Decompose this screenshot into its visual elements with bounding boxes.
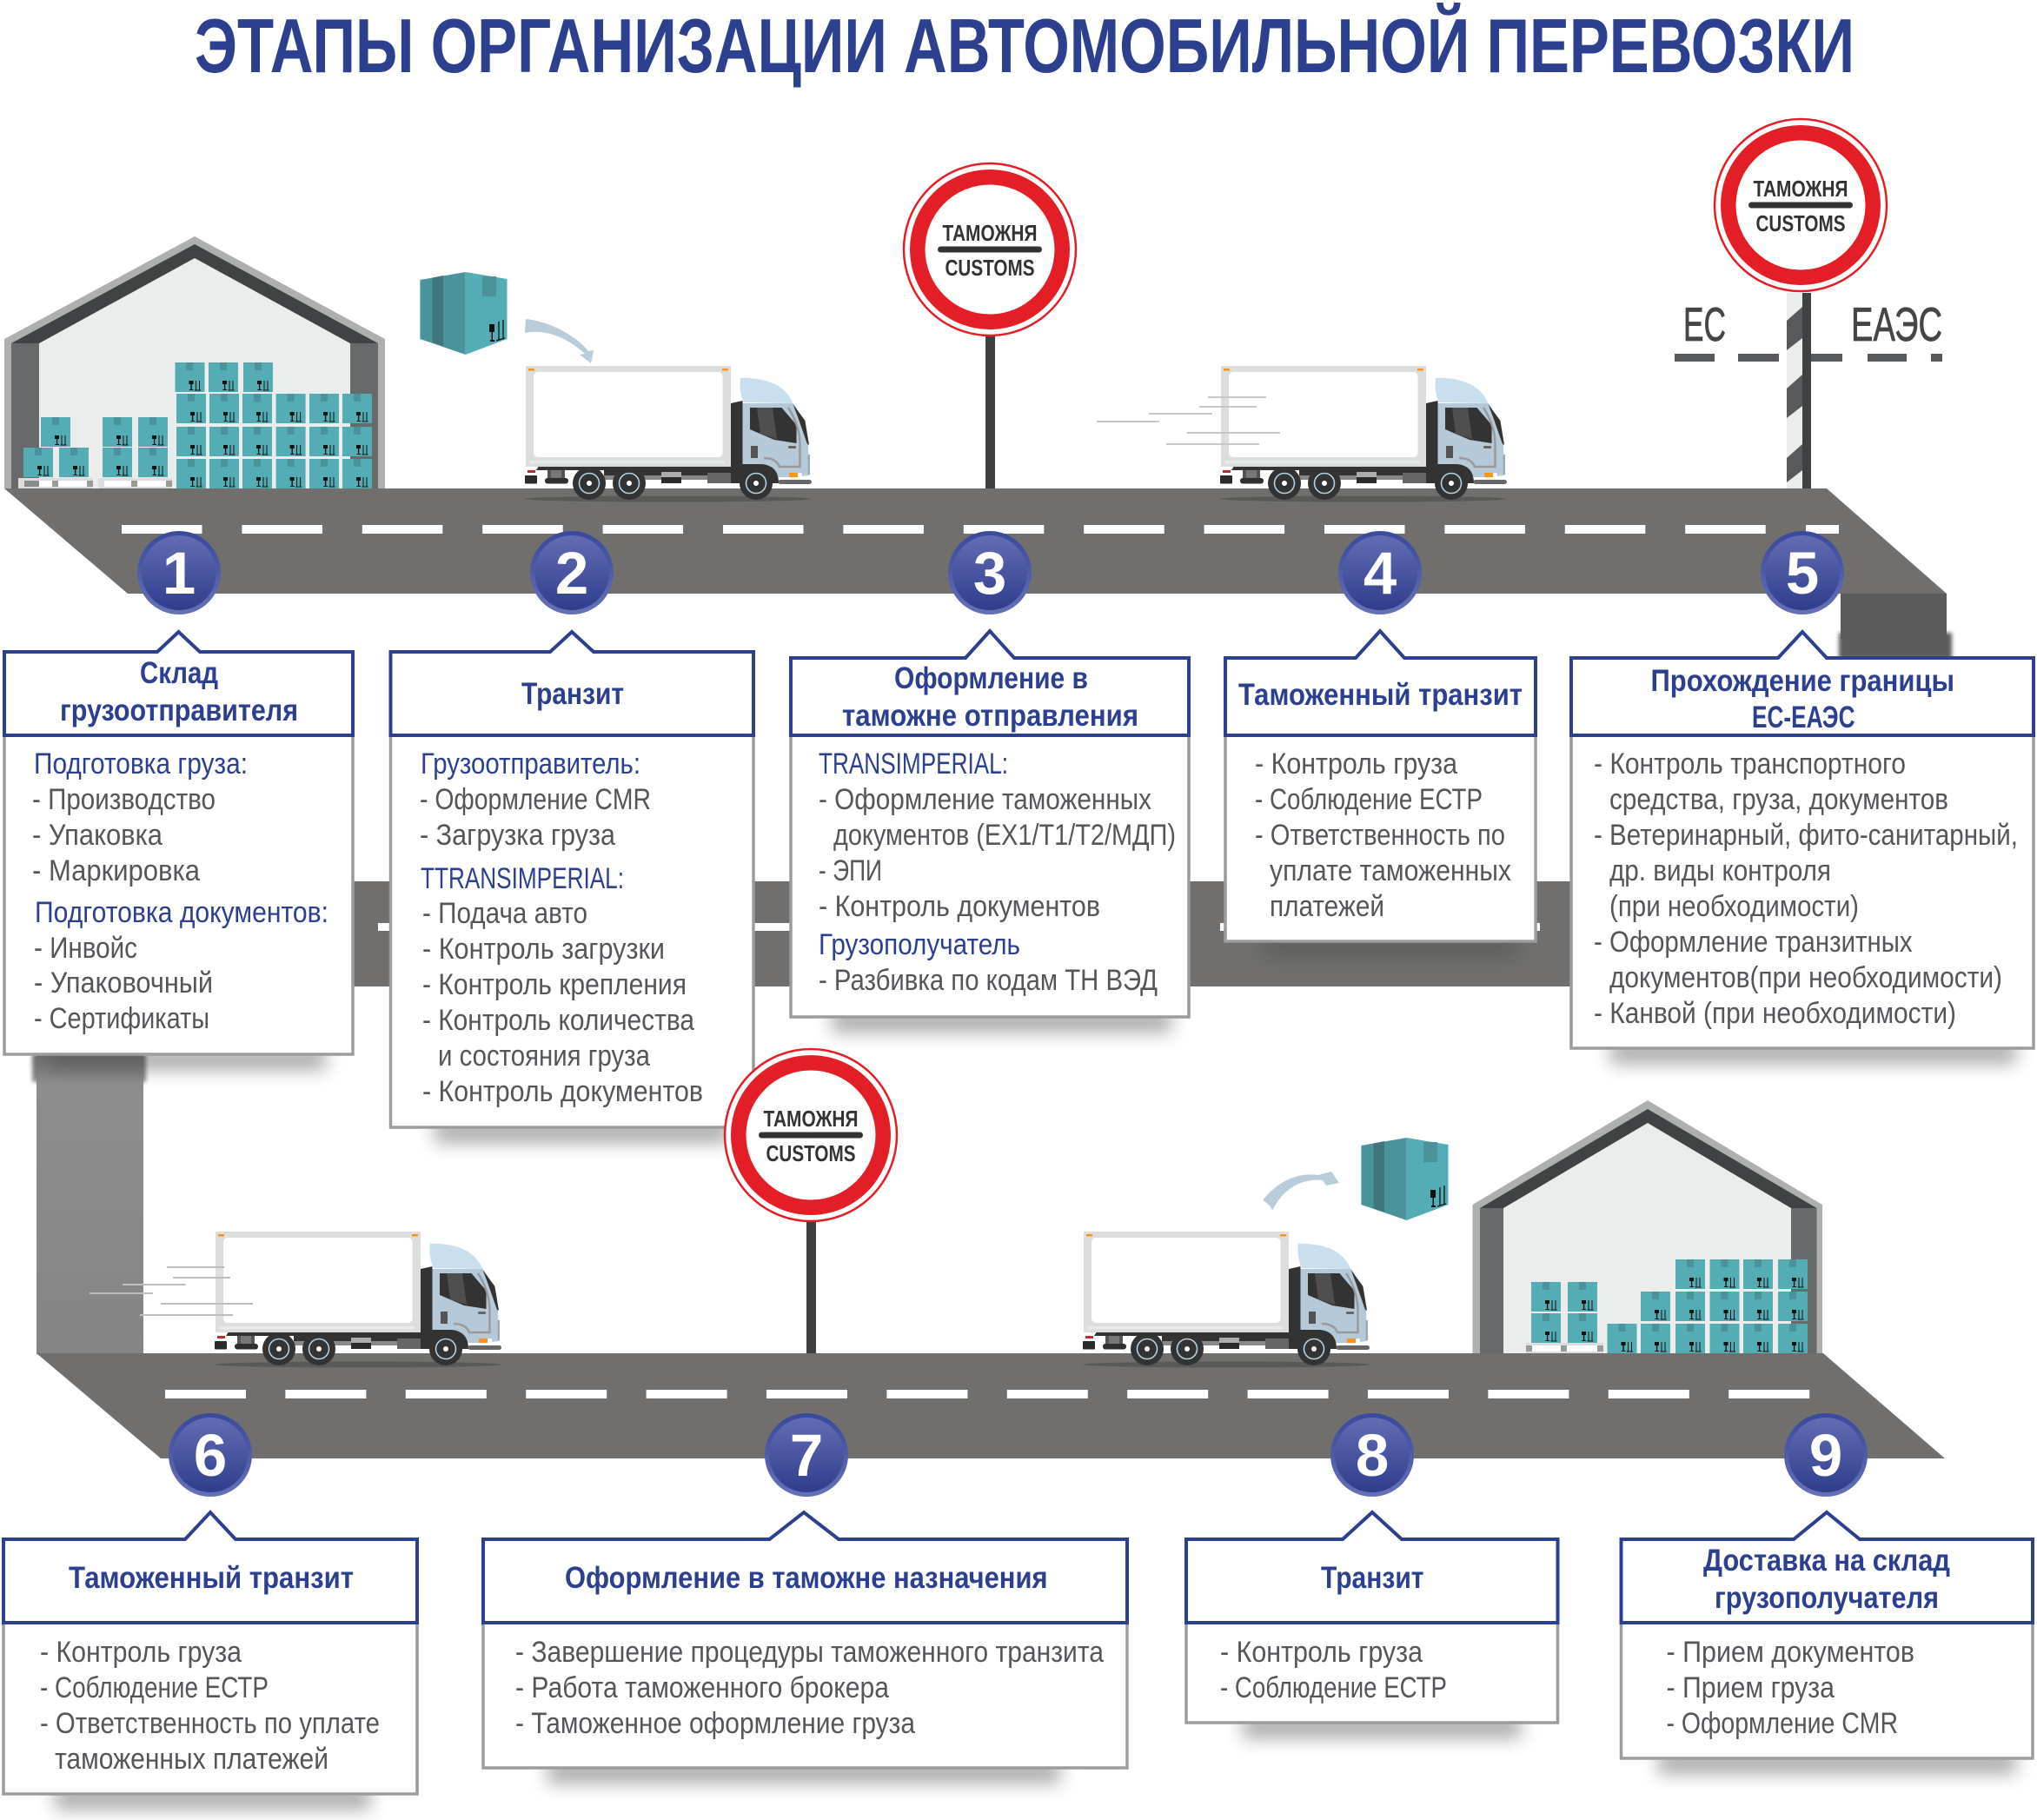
text: step 1 list: - Упаковка	[32, 819, 163, 852]
text: step 2 list: - Контроль количества	[422, 1004, 694, 1037]
heading: step 1: грузоотправителя	[60, 694, 298, 727]
icon: large crate (loading)	[420, 272, 508, 355]
text: step 1 list: Подготовка груза:	[34, 747, 248, 780]
heading: step 1: Склад	[140, 656, 218, 690]
customs sign: step 3: ТАМОЖНЯ	[942, 220, 1038, 246]
truck: step 8	[1083, 1232, 1370, 1368]
text: step 3 list: - Разбивка по кодам ТН ВЭД	[819, 964, 1158, 997]
text: step 2 list	[420, 747, 703, 1108]
arrow: crate to truck	[525, 319, 594, 363]
text: step 1 list	[32, 747, 328, 1035]
customs sign: step 7	[725, 1049, 897, 1353]
text: step 6 list: - Соблюдение ЕСТР	[40, 1671, 269, 1704]
text: step 7 list: - Таможенное оформление груза	[515, 1707, 915, 1740]
customs sign: step 5: CUSTOMS	[1755, 210, 1846, 236]
panel: step 8 transit	[1186, 1512, 1557, 1738]
step number badge 1	[137, 531, 221, 614]
text: step 1 list: - Производство	[32, 783, 216, 816]
step number badge 2: 2	[555, 540, 588, 607]
heading: step 1	[60, 656, 298, 727]
panel: step 6 customs transit	[3, 1512, 417, 1810]
customs sign: step 5	[1715, 119, 1887, 291]
arrow: truck to crate	[1263, 1172, 1339, 1211]
step number badge 7: 7	[790, 1422, 823, 1489]
panel: step 2 transit	[391, 632, 753, 1143]
step number badge 3	[948, 531, 1032, 614]
text: step 2 list: Грузоотправитель:	[421, 747, 640, 780]
text: step 9 list	[1667, 1636, 1914, 1740]
text: step 9 list: - Прием документов	[1667, 1636, 1914, 1669]
text: step 7 list	[515, 1636, 1104, 1740]
text: step 4 list: уплате таможенных	[1270, 854, 1511, 887]
warehouse: consignee	[1472, 1100, 1822, 1353]
customs sign: step 3: CUSTOMS	[946, 255, 1034, 281]
step number badge 4: 4	[1364, 540, 1397, 607]
heading: step 4: Таможенный транзит	[1238, 678, 1523, 712]
step number badge 9: 9	[1809, 1422, 1842, 1489]
panel: step 1 shipper warehouse	[4, 632, 353, 1070]
customs sign: step 7: CUSTOMS	[766, 1140, 855, 1166]
truck: step 2	[525, 366, 812, 502]
step number badge 6	[169, 1413, 252, 1497]
text: step 1 list: - Упаковочный	[34, 966, 213, 1000]
text: step 5 list: др. виды контроля	[1609, 854, 1831, 887]
text: step 1 list: Подготовка документов:	[35, 896, 328, 929]
label: EAEU: ЕАЭС	[1851, 297, 1942, 351]
text: step 3 list: - ЭПИ	[819, 854, 882, 887]
heading: step 9: Доставка на склад	[1703, 1544, 1950, 1578]
step number badge 2	[530, 531, 614, 614]
truck: step 4	[1097, 366, 1507, 502]
warehouse: shipper	[4, 236, 385, 488]
customs sign: step 3	[904, 163, 1076, 488]
text: step 5 list	[1594, 747, 2018, 1030]
heading: step 5	[1651, 664, 1954, 734]
step number badge 8	[1330, 1413, 1414, 1497]
step number badge 7	[765, 1413, 848, 1497]
label: EU: ЕС	[1683, 297, 1726, 351]
border barrier post	[1787, 293, 1811, 488]
text: step 2 list: - Контроль загрузки	[422, 933, 665, 966]
border line dashes	[1675, 354, 1942, 362]
text: step 4 list: платежей	[1270, 890, 1384, 923]
step number badge 3: 3	[973, 540, 1006, 607]
text: step 2 list: - Загрузка груза	[420, 819, 615, 852]
text: step 8 list: - Соблюдение ЕСТР	[1220, 1671, 1447, 1704]
speed lines: step 4	[1097, 397, 1280, 444]
speed lines: step 6	[90, 1267, 253, 1315]
text: step 7 list: - Завершение процедуры таможенного транзита	[515, 1636, 1104, 1669]
road: upper	[4, 488, 1947, 594]
panel: step 7 customs of destination	[483, 1512, 1127, 1783]
text: step 5 list: - Оформление транзитных	[1594, 926, 1913, 959]
text: step 9 list: - Оформление CMR	[1667, 1707, 1898, 1740]
road: lower	[36, 1353, 1945, 1458]
text: step 6 list: - Ответственность по уплате	[40, 1707, 380, 1740]
text: step 6 list	[40, 1636, 380, 1776]
heading: step 8: Транзит	[1321, 1561, 1423, 1595]
step number badge 4	[1338, 531, 1422, 614]
panel: step 5 border crossing	[1571, 632, 2034, 1064]
customs sign: step 5: ТАМОЖНЯ	[1754, 176, 1848, 202]
text: step 6 list: таможенных платежей	[55, 1743, 328, 1776]
text: step 4 list: - Контроль груза	[1255, 747, 1457, 780]
heading: step 3: Оформление в	[894, 661, 1088, 695]
text: step 5 list: - Канвой (при необходимости)	[1594, 997, 1956, 1030]
text: step 2 list: - Контроль крепления	[422, 968, 687, 1001]
text: step 2 list: и состояния груза	[438, 1040, 650, 1073]
road: left vertical section	[32, 1053, 146, 1354]
panel: step 4 customs transit	[1225, 631, 1536, 958]
truck: step 6	[90, 1232, 501, 1368]
step number badge 5: 5	[1786, 540, 1819, 607]
heading: step 3	[842, 661, 1138, 733]
text: step 4 list: - Ответственность по	[1255, 819, 1505, 852]
customs sign: step 7: ТАМОЖНЯ	[763, 1106, 859, 1132]
text: step 3 list: документов (EX1/T1/T2/МДП)	[833, 819, 1176, 852]
text: step 9 list: - Прием груза	[1667, 1671, 1835, 1704]
text: step 1 list: - Сертификаты	[34, 1002, 209, 1035]
text: step 4 list: - Соблюдение ЕСТР	[1255, 783, 1483, 816]
road: connector behind boxes	[352, 881, 1586, 986]
step number badge 6: 6	[194, 1422, 227, 1489]
text: step 2 list: - Оформление CMR	[420, 783, 651, 816]
crate stacks: shipper warehouse	[18, 362, 372, 488]
text: step 2 list: - Подача авто	[422, 897, 587, 930]
text: step 3 list: TRANSIMPERIAL:	[819, 747, 1008, 780]
crate stacks: consignee warehouse	[1526, 1259, 1808, 1353]
text: step 3 list: - Оформление таможенных	[819, 783, 1151, 816]
panel: step 9 delivery to consignee	[1622, 1512, 2033, 1774]
text: step 2 list: TTRANSIMPERIAL:	[421, 862, 624, 895]
heading: step 7: Оформление в таможне назначения	[565, 1561, 1048, 1595]
icon: large crate (unloading)	[1361, 1138, 1448, 1220]
text: step 5 list: - Контроль транспортного	[1594, 747, 1906, 780]
step number badge 5	[1761, 531, 1844, 614]
text: step 3 list	[819, 747, 1176, 997]
text: step 6 list: - Контроль груза	[40, 1636, 242, 1669]
text: step 2 list: - Контроль документов	[422, 1075, 703, 1108]
panel: step 3 customs of departure	[791, 631, 1189, 1033]
text: step 8 list: - Контроль груза	[1220, 1636, 1423, 1669]
heading: step 9: грузополучателя	[1715, 1581, 1939, 1615]
text: step 8 list	[1220, 1636, 1447, 1704]
text: step 5 list: (при необходимости)	[1609, 890, 1859, 923]
text: step 7 list: - Работа таможенного брокера	[515, 1671, 889, 1704]
text: step 5 list: средства, груза, документов	[1609, 783, 1948, 816]
step number badge 1: 1	[163, 540, 196, 607]
heading: step 5: Прохождение границы	[1651, 664, 1954, 698]
text: step 1 list: - Маркировка	[32, 854, 200, 887]
step number badge 8: 8	[1356, 1422, 1389, 1489]
heading: step 6: Таможенный транзит	[69, 1561, 354, 1595]
text: step 3 list: Грузополучатель	[819, 928, 1020, 961]
heading: step 5: ЕС-ЕАЭС	[1752, 701, 1855, 734]
text: step 3 list: - Контроль документов	[819, 890, 1100, 923]
text: step 4 list	[1255, 747, 1511, 923]
heading: step 2: Транзит	[521, 677, 624, 711]
heading: step 3: таможне отправления	[842, 699, 1138, 733]
text: step 1 list: - Инвойс	[34, 932, 137, 965]
heading: step 9	[1703, 1544, 1950, 1615]
road: descending section at right	[1839, 594, 1952, 659]
step number badge 9	[1784, 1413, 1868, 1497]
